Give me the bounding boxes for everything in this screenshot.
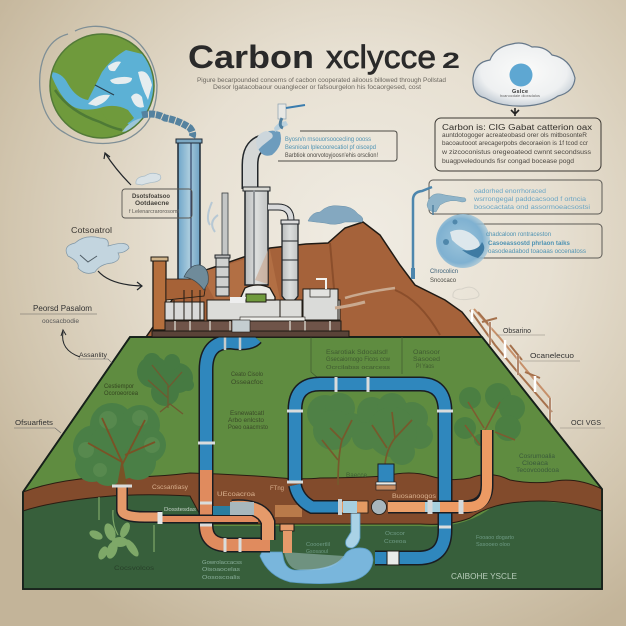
note: right hill [516, 453, 559, 474]
cloud: left with label [66, 226, 129, 273]
text box: carbon main [435, 118, 601, 171]
title [188, 39, 460, 75]
tree: large left [73, 403, 166, 486]
pipe: lower horizontal pieces [340, 499, 386, 515]
note: right of centre [413, 349, 441, 370]
text box: carbon main: bacoautooot arecagerpobs decoraeion is 1f tcod ccr [442, 140, 588, 147]
label: small right of mountain: Sncocaco [430, 278, 457, 284]
pipe: right orange [388, 430, 487, 514]
plant in subsoil [88, 497, 154, 561]
leader lines from factory [311, 337, 402, 378]
plant machinery [165, 279, 365, 321]
note: lower centre: Oososcoalis [202, 575, 240, 581]
cloud callout: top right [473, 43, 575, 116]
note: soil band labels: Cscsantiasy [152, 484, 189, 491]
note: soil band labels: FTng [270, 485, 284, 492]
cloud: above mountain [308, 206, 363, 224]
note: lower right: Ccoeoa [384, 539, 407, 545]
icon: blue pipe and drip [413, 187, 466, 279]
note: centre stack: Arbo enlcsto [228, 417, 264, 424]
note: soil band labels [152, 484, 437, 500]
text box: chimney note: Ootdaecne [135, 201, 170, 207]
ground: dark green subsoil [23, 493, 602, 589]
note: centre stack [228, 371, 268, 431]
tree: right [454, 383, 525, 446]
factory [151, 104, 365, 337]
text box: chimney note [122, 189, 192, 218]
blue chimney [176, 139, 202, 292]
note: right of centre: Pl Yaos [416, 363, 435, 370]
cloud: left with label: Cotsoatrol [71, 226, 112, 235]
text box: chimney note: f Lelenarcrarorosomt [129, 209, 180, 215]
text box: water sphere note [470, 224, 602, 258]
ground outline [23, 337, 602, 589]
note: lower right: Fooaoo dogarto [476, 535, 514, 541]
label: small right of mountain [430, 269, 458, 284]
text box: blue pipe note: wsrrongegal paddcacsood f ortncia [473, 196, 586, 203]
subtitle: Pigure becarpounded concerns of cacbon cooperated ailoous billowed through Pollstad [197, 77, 446, 84]
label: small right of mountain: Chrocolicn [430, 269, 458, 275]
text box: carbon main: Carbon is: CIG Gabat catterion oax [442, 123, 592, 132]
pipe: connector block [213, 502, 302, 553]
note: top centre [326, 349, 390, 371]
note: right hill: Tecovcoodcoa [516, 467, 559, 474]
fence on right slope [470, 309, 552, 422]
text box: blue pipe note: oadorhed enorrhoraced [474, 188, 546, 195]
text box: carbon main: w zizcoconistus oregeoateod cwnnt secondsuss [441, 149, 591, 156]
label: obsarino: Obsarino [503, 326, 531, 335]
note: lower right: Sssooeo oloo [476, 542, 510, 548]
note: over water: Gsosaoul [306, 549, 328, 555]
brown chimney [151, 257, 208, 330]
pipe: big blue loop [287, 377, 453, 558]
note: over water: Coooertlil [306, 542, 330, 548]
note: soil band labels: UEcoacroa [217, 491, 255, 498]
label: assanlity: Assanlity [79, 352, 108, 359]
pipe: left blue and orange line [112, 336, 270, 552]
ground notes [104, 349, 559, 581]
planter box [376, 464, 396, 490]
water sphere text [486, 231, 587, 255]
text box: factory note: Byosn/n rnsouorsoocecling oooss [285, 136, 372, 143]
note: left of tree [104, 383, 138, 397]
cloud callout: top right: Gslce [512, 89, 528, 95]
note: lower right: Ocscor [385, 531, 405, 537]
note: top centre: Ocrcilabss ocarcess [326, 365, 390, 371]
note: right of centre: Sasoced [413, 356, 440, 363]
note: lower right [384, 531, 514, 548]
text box: blue pipe note [429, 180, 602, 214]
small right chimney [268, 207, 299, 302]
arrow: cloud to factory [98, 271, 142, 290]
mountain [146, 222, 482, 337]
note: over water [306, 542, 330, 555]
title: 2 [442, 48, 460, 73]
note: lower centre: Oisoaocelas [202, 567, 240, 573]
note: soil band labels: Buosanoogos [392, 493, 437, 500]
note: top centre: Gsecaiornogo Ficos ccw [326, 356, 390, 363]
subtitle: Desor lgatacobaour ouanglecer or fafsourgelon his focaorgesed, cost [213, 84, 421, 91]
label: ofsuarfiets [14, 420, 61, 433]
icon: water sphere [436, 214, 490, 268]
note: right of centre: Oansoor [413, 349, 441, 356]
note: above orange pipe: Dosstesdas [164, 507, 196, 513]
label: ocanelecuo [522, 351, 580, 361]
note: left of tree: Cestiempor [104, 383, 135, 390]
note: left of tree: Ocoroeorcea [104, 390, 138, 397]
note: lower centre: Gowrolaccacss [202, 560, 242, 566]
text box: factory note: Besnioan lplecoorecatiol pf oiscepd [285, 144, 376, 151]
ground: brown soil band [23, 473, 602, 524]
label: oci vgs [560, 418, 605, 428]
faint cloud outline [453, 287, 479, 300]
note: centre stack: Poeo oaacmsto [228, 424, 268, 431]
note: lower centre [202, 560, 242, 581]
arrow: to globe [104, 153, 131, 185]
grey main chimney [243, 143, 270, 285]
plant foundation [152, 320, 349, 337]
text box: chimney note: Dsotsfoatsoo [132, 194, 170, 200]
text box: factory note: Barbtiok onorvotoyjoosn'ehis orsclion! [285, 152, 378, 159]
note: right hill: Cosrumoalia [519, 453, 555, 460]
note: right hill: Cloeaca [522, 460, 548, 467]
label: obsarino [496, 326, 545, 335]
note: top centre: Esarotiak Sdocatsd! [326, 349, 388, 356]
globe [40, 26, 160, 143]
note: under trees: Baecce [346, 472, 367, 479]
caption: carbon cycle: CAIBOHE YSCLE [451, 572, 517, 581]
smoke plume [142, 114, 193, 137]
note: plant caption: Cocsvolcos [114, 565, 155, 572]
note: centre stack: Esnewatcatl [230, 410, 265, 417]
water sphere text: Casoeassostd phrlaon taiks [488, 240, 570, 247]
water sphere text: oasodeadabod toaoaas occenatoss [488, 248, 587, 255]
label: oci vgs: OCI VGS [571, 418, 601, 427]
text box: factory note [278, 131, 397, 161]
title: Carbon [188, 39, 314, 75]
cloud callout: top right: hcanocdaie dioxsdalos [500, 94, 540, 98]
tree: centre pair [307, 393, 433, 485]
smoke from grey chimney [256, 104, 305, 156]
title: xclycce [326, 39, 436, 75]
tree: upper left [137, 353, 194, 414]
label: ocanelecuo: Ocanelecuo [530, 351, 574, 360]
water sphere text: chadcaloon rontraceston [486, 231, 551, 238]
label: process left [20, 304, 97, 325]
text box: carbon main: auntdotogoger acreateobasd orer ols mitbosonteR [442, 132, 588, 139]
note: centre stack: Ceato Cisolo [231, 371, 263, 378]
label: process left: Peorsd Pasalom [33, 304, 92, 313]
text box: carbon main: buagpveledounds fisr congad bocease pogd [442, 158, 575, 165]
label: ofsuarfiets: Ofsuarfiets [15, 420, 54, 427]
ground: green hillside [23, 337, 602, 589]
subtitle [197, 77, 446, 91]
label: process left: oocsacbodie [42, 319, 80, 325]
arrow: curved left [61, 330, 80, 357]
note: centre stack: Osseacfoc [231, 379, 264, 386]
water pool [260, 510, 373, 584]
text box: blue pipe note: bosocactata ond assormoeacsostsi [474, 204, 590, 211]
label: assanlity [78, 352, 112, 363]
thin vent stack [208, 193, 230, 296]
icon: small cloud above note [136, 173, 161, 185]
pipe: white coupler [387, 551, 399, 565]
